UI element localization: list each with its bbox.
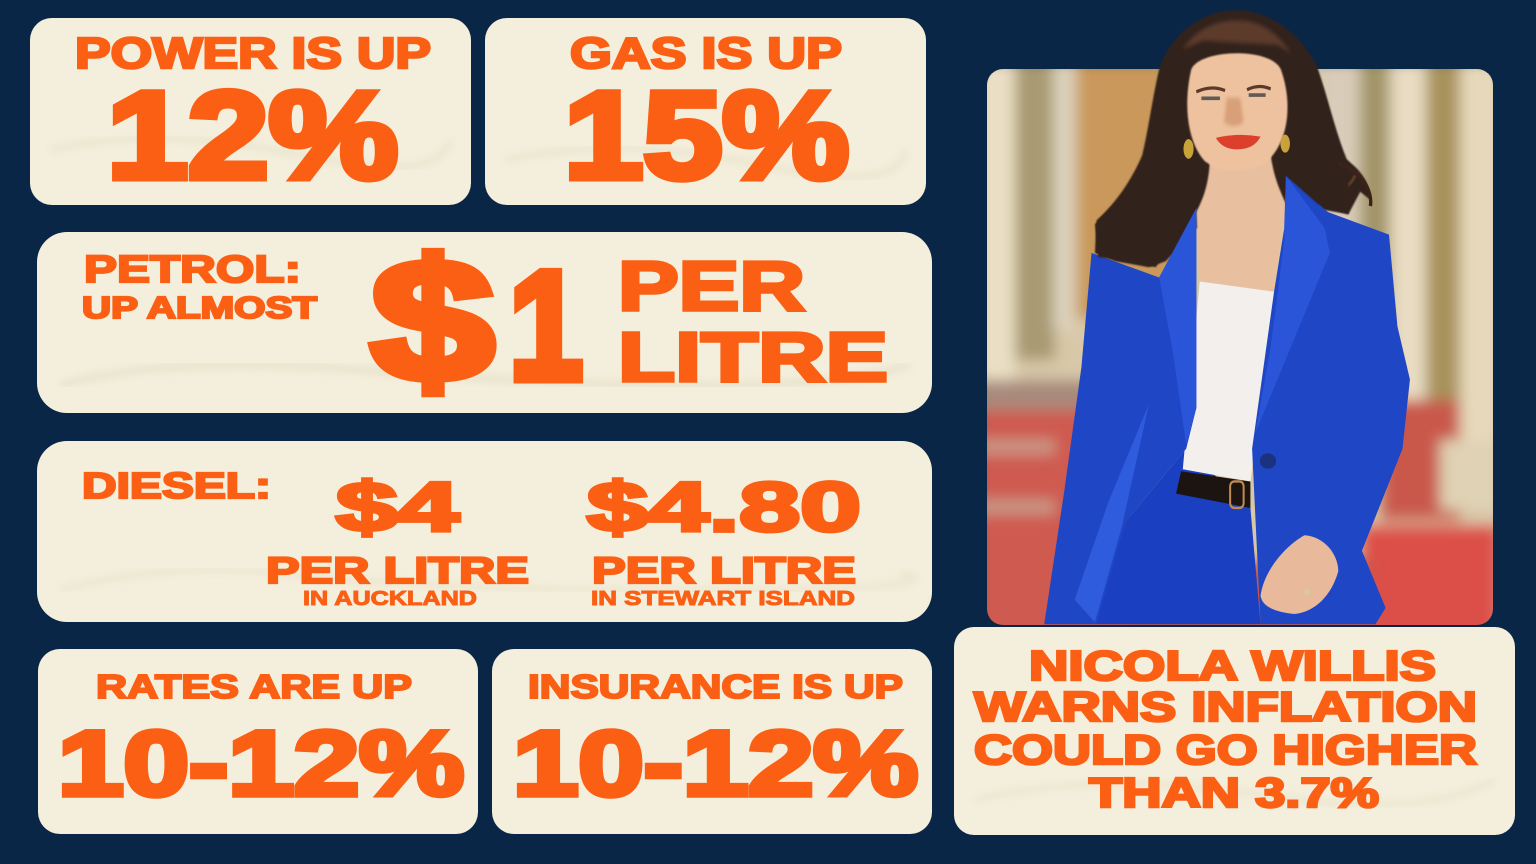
mouth — [1216, 135, 1261, 149]
heading: gas is up: GAS IS UP — [570, 29, 842, 78]
panel: petrol — [37, 225, 932, 417]
hair back — [1095, 10, 1370, 267]
figure: $4.80 per litre in Stewart Island — [587, 468, 861, 610]
person — [1044, 10, 1410, 624]
headline text: COULD GO HIGHER — [974, 726, 1477, 773]
subheading: up almost: UP ALMOST — [82, 290, 317, 325]
figure: $4 per litre in Auckland — [266, 468, 529, 610]
headline text: THAN 3.7% — [1089, 769, 1379, 816]
neck and chest — [1196, 155, 1286, 294]
headline text: WARNS INFLATION — [974, 683, 1477, 730]
panel: power — [30, 18, 471, 205]
belt — [1176, 471, 1250, 508]
figure: 10-12% insurance: 10-12% — [513, 713, 918, 815]
figure: 12%: 12% — [107, 67, 398, 205]
sleeve highlight — [1075, 404, 1149, 622]
face — [1187, 53, 1288, 170]
heading: insurance is up: INSURANCE IS UP — [528, 668, 903, 705]
figure: per: PER — [618, 247, 805, 325]
headline text: NICOLA WILLIS — [1029, 642, 1436, 689]
jacket — [1044, 208, 1196, 624]
figure: $1 — [371, 225, 583, 417]
photo background: corridor — [975, 60, 1505, 645]
panel: insurance — [492, 649, 932, 834]
heading: petrol: PETROL: — [84, 249, 301, 291]
trousers — [1095, 449, 1261, 624]
panel: diesel — [37, 441, 932, 622]
figure: $4.80 per litre in Stewart Island: IN STEWART ISLAND — [591, 588, 855, 610]
hand — [1261, 535, 1338, 614]
figure: $4 per litre in Auckland: PER LITRE — [266, 550, 529, 591]
lapels — [1159, 208, 1196, 445]
panel: gas — [485, 18, 926, 205]
panel: rates — [38, 649, 478, 834]
heading: rates are up: RATES ARE UP — [96, 668, 412, 705]
figure: 10-12% rates: 10-12% — [58, 713, 464, 815]
nose shadow — [1224, 98, 1244, 126]
jacket button — [1260, 453, 1276, 469]
heading: diesel: DIESEL: — [82, 465, 271, 506]
figure: $4 per litre in Auckland: IN AUCKLAND — [303, 588, 477, 610]
figure: litre: LITRE — [618, 318, 888, 396]
eyes and brows — [1196, 86, 1271, 92]
figure: $4.80 per litre in Stewart Island: $4.80 — [587, 468, 861, 546]
figure: $1: $ — [371, 225, 494, 417]
figure: $1: 1 — [509, 239, 583, 412]
headline text — [974, 642, 1477, 816]
figure: 15%: 15% — [564, 67, 849, 205]
photo: Nicola Willis — [975, 10, 1505, 645]
panel: headline — [954, 627, 1515, 835]
figure: $4.80 per litre in Stewart Island: PER LITRE — [592, 550, 856, 591]
heading: power is up: POWER IS UP — [75, 29, 431, 78]
earrings — [1183, 135, 1290, 159]
hair front — [1094, 178, 1159, 268]
white top — [1183, 282, 1274, 481]
figure: $4 per litre in Auckland: $4 — [336, 468, 459, 546]
